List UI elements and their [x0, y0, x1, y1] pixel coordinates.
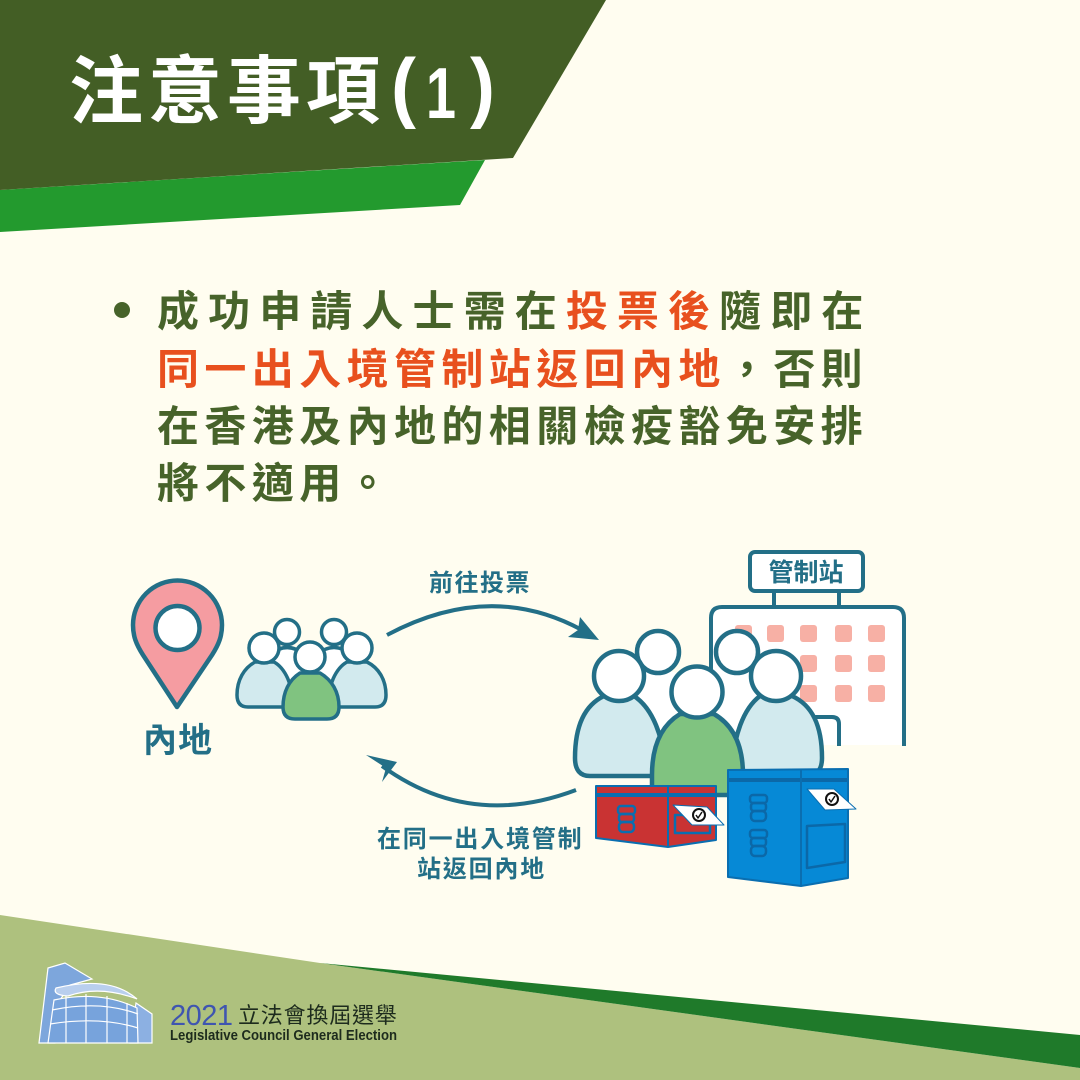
logo: council building [39, 963, 152, 1043]
title: 注意事項 [69, 50, 385, 133]
logo text: Legislative Council General Election [170, 1028, 397, 1044]
title: 1 [426, 54, 456, 134]
title: ( [391, 42, 416, 130]
footer band [0, 915, 1080, 1080]
bullet text: 將不適用。 [157, 460, 394, 507]
icon: blue ballot box [728, 769, 856, 886]
arrow: to polling [387, 606, 599, 640]
bullet dot [114, 302, 130, 318]
bullet text: 成功申請人士需在投票後隨即在 [157, 288, 872, 335]
label: return to mainland [377, 826, 583, 883]
icon: location pin [133, 580, 222, 707]
label: mainland: 內地 [143, 722, 213, 760]
title: ) [470, 42, 495, 130]
bullet text: 同一出入境管制站返回內地，否則 [157, 346, 868, 393]
icon: red ballot box [596, 786, 724, 847]
label: go vote: 前往投票 [429, 570, 531, 597]
logo text: 立法會換屆選舉 [238, 1003, 398, 1028]
title [69, 42, 495, 134]
bullet text: 在香港及內地的相關檢疫豁免安排 [157, 403, 868, 450]
icon: control point building [710, 552, 905, 746]
logo text [170, 1000, 398, 1044]
arrow: return [366, 755, 576, 805]
logo text: 2021 [170, 1000, 233, 1032]
icon: small group of people [237, 620, 386, 719]
label: return to mainland: 站返回內地 [417, 856, 546, 883]
icon: large group of people [575, 631, 822, 795]
icon: control point building: 管制站 [768, 559, 844, 587]
header banner [0, 0, 606, 232]
bullet text [114, 288, 872, 507]
label: return to mainland: 在同一出入境管制 [377, 826, 583, 853]
